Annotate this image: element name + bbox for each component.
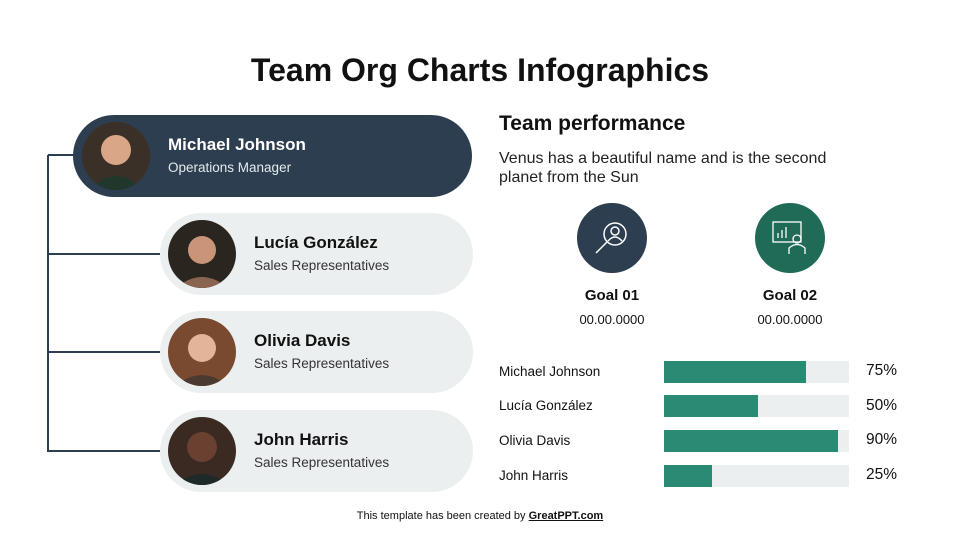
title: Team Org Charts Infographics [251, 52, 709, 88]
bar: Lucía: Lucía González [499, 398, 593, 413]
bar: Olivia: Olivia Davis [499, 433, 570, 448]
name: Michael Johnson [168, 135, 306, 154]
card: Olivia Davis: Olivia Davis [254, 331, 350, 350]
goal 01: 00.00.0000 [579, 312, 645, 327]
bar: Michael: Michael Johnson [499, 364, 600, 379]
card: John Harris: Sales Representatives [254, 455, 389, 470]
role: Operations Manager [168, 160, 291, 175]
card: Olivia Davis: Sales Representatives [254, 356, 389, 371]
heading: Team performance: Team performance [499, 112, 685, 135]
footer: This template has been created by GreatPPT.com [357, 510, 603, 522]
text: 50% [866, 397, 897, 414]
text: 25% [866, 466, 897, 483]
icon: magnifier person [577, 203, 647, 273]
icon: presentation [755, 203, 825, 273]
card: Lucía González: Sales Representatives [254, 258, 389, 273]
card: Olivia Davis [160, 311, 473, 393]
goal 01: Goal 01 [585, 287, 639, 304]
text: 90% [866, 431, 897, 448]
goal 02: Goal 02 [763, 287, 817, 304]
goal 01 [577, 203, 647, 327]
connector lines [47, 154, 160, 452]
description: Venus has a beautiful name and is the second planet from the Sun [499, 150, 826, 186]
card: John Harris: John Harris [254, 430, 348, 449]
card: Lucía González [160, 213, 473, 295]
goal 02: 00.00.0000 [757, 312, 823, 327]
text: 75% [866, 362, 897, 379]
goal 02 [755, 203, 825, 327]
bar chart [495, 355, 915, 490]
photo: Michael [82, 122, 150, 190]
card: John Harris [160, 410, 473, 492]
card: Lucía González: Lucía González [254, 233, 378, 252]
card: Michael Johnson [73, 115, 472, 197]
bar: John: John Harris [499, 468, 568, 483]
